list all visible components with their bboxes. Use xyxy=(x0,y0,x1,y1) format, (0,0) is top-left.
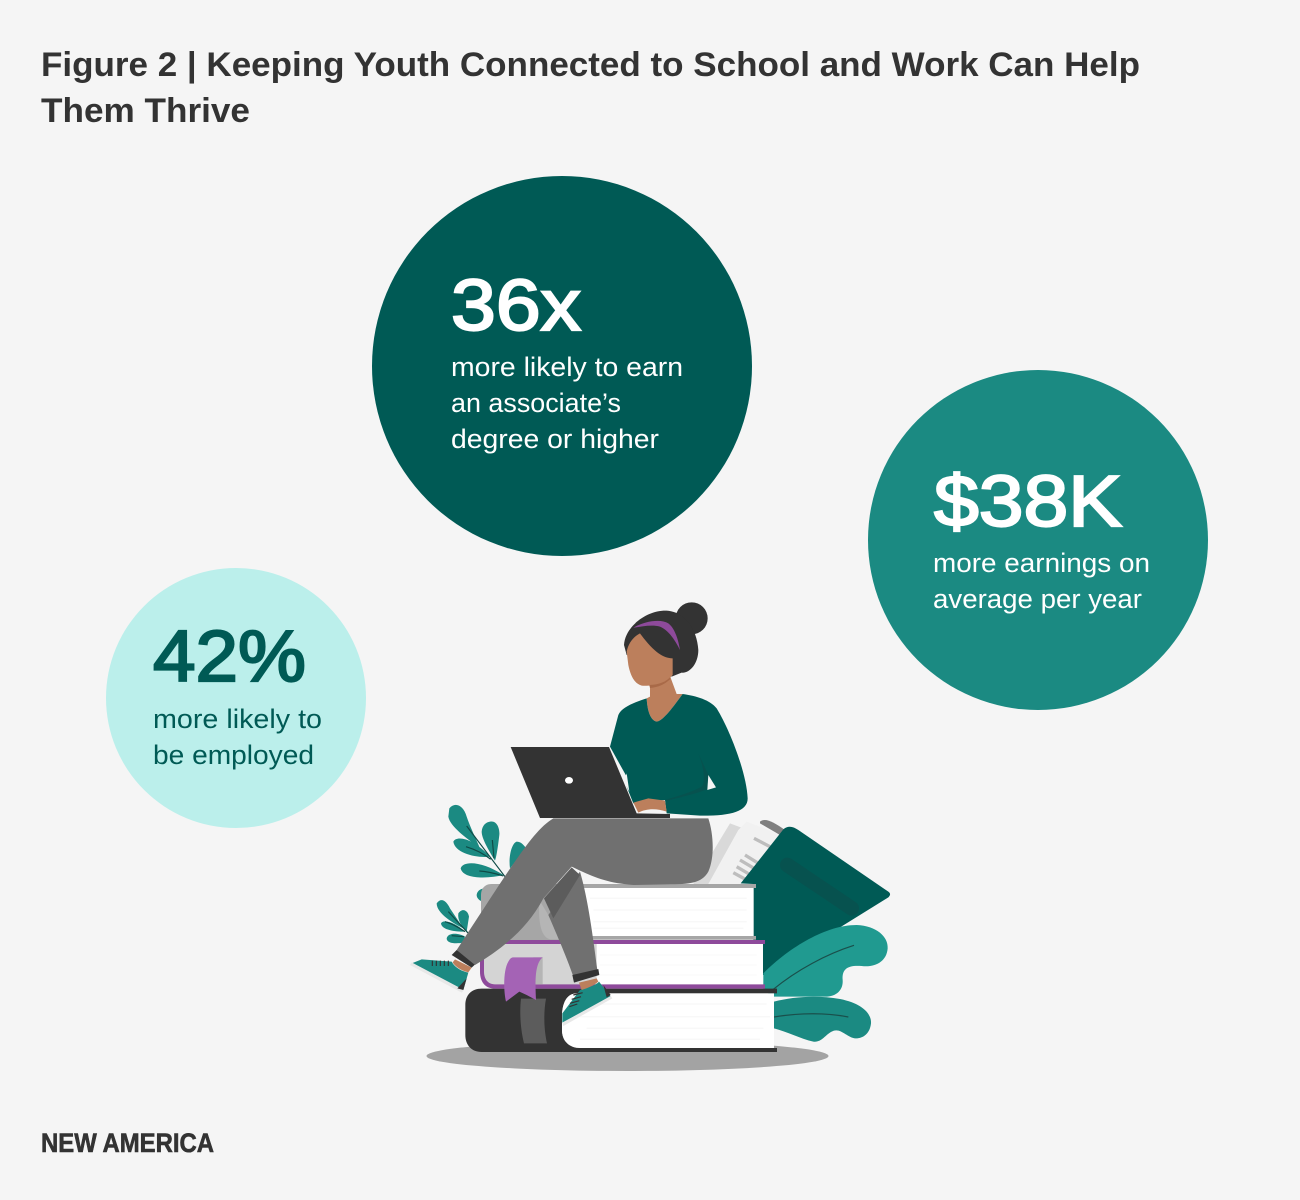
stat circle: $38K: $38K xyxy=(934,462,1122,542)
stat circle: 36x: degree or higher xyxy=(451,424,659,454)
stat circle: 36x: an associate’s xyxy=(451,388,621,418)
stat circle: $38K: more earnings on xyxy=(933,548,1150,578)
logo: New America: NEW AMERICA xyxy=(41,1128,214,1158)
person upper body xyxy=(511,602,748,818)
title: Them Thrive xyxy=(41,92,250,130)
stat circle: 42% xyxy=(106,568,366,828)
icon: left plants xyxy=(437,805,526,943)
books, plants and legs xyxy=(410,805,890,1052)
icon: laptop xyxy=(511,747,670,818)
title xyxy=(41,46,1140,130)
stat circle: 36x xyxy=(372,176,752,556)
icon: bottom book xyxy=(465,989,777,1052)
icon: top book xyxy=(481,884,756,940)
icon: neck and face xyxy=(627,633,683,722)
stat circle: 42%: be employed xyxy=(153,740,314,770)
icon: right leaves xyxy=(763,925,888,1042)
icon: bookmark xyxy=(504,957,543,1002)
stat circle: 42%: more likely to xyxy=(153,704,322,734)
icon: hair xyxy=(624,602,708,677)
stat circle: $38K xyxy=(868,370,1208,710)
illustration: student on books xyxy=(410,602,890,1071)
icon: headband xyxy=(633,621,680,650)
stat circle: 42%: 42% xyxy=(153,617,306,697)
title: Figure 2 | Keeping Youth Connected to School and Work Can Help xyxy=(41,46,1140,84)
stat circle: 36x: more likely to earn xyxy=(451,352,683,382)
icon: sweater xyxy=(610,694,748,816)
icon: hands xyxy=(633,798,667,813)
legs and shoes xyxy=(410,818,713,1026)
ground shadow xyxy=(426,1041,828,1071)
stat circle: 36x: 36x xyxy=(451,266,581,346)
icon: folder and papers xyxy=(693,820,890,975)
stat circle: $38K: average per year xyxy=(933,584,1142,614)
icon: middle book xyxy=(480,940,765,989)
